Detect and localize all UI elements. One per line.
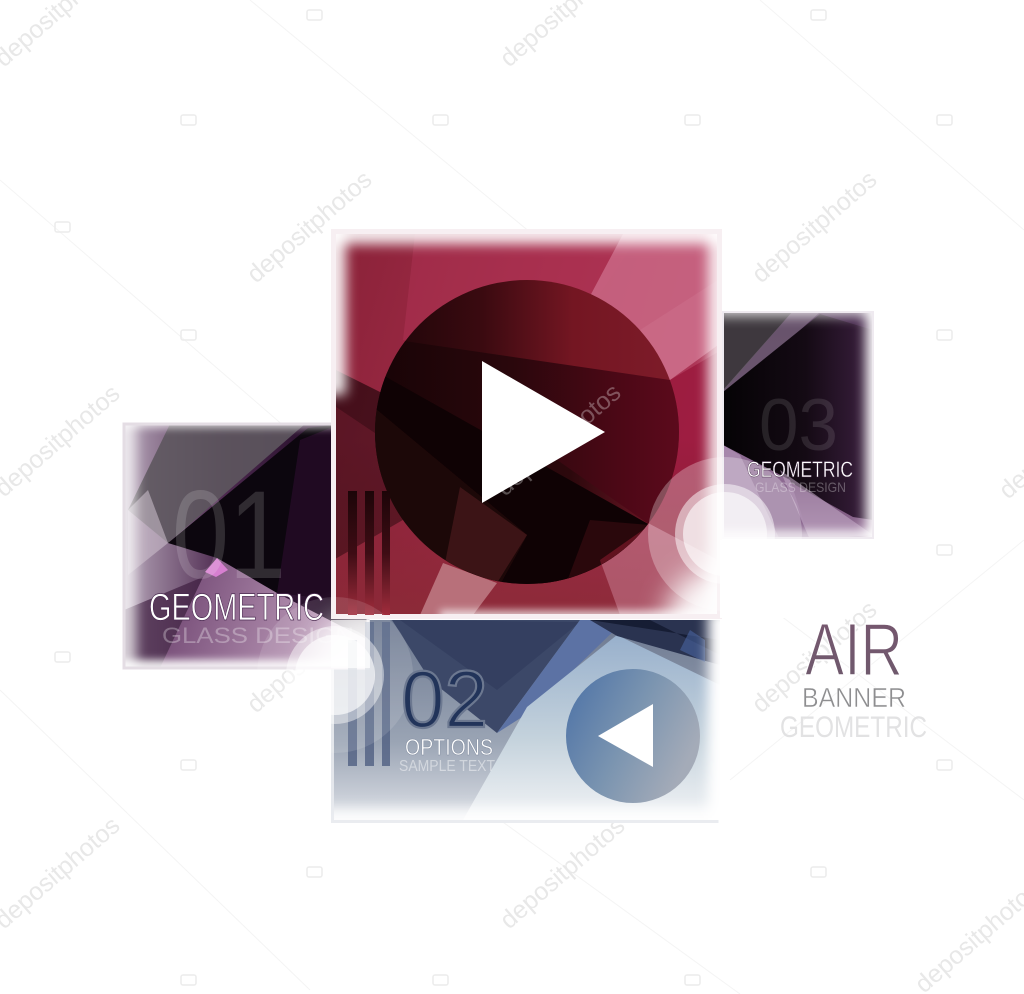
panel: 02 options (bottom, blue)	[331, 620, 720, 823]
subtitle: banner: BANNER	[802, 682, 906, 713]
ring: left glass circles	[257, 597, 413, 753]
number 01: 01	[172, 466, 286, 605]
heading: geometric right: GEOMETRIC	[747, 457, 853, 482]
subheading: glass design left: GLASS DESIGN	[162, 623, 354, 648]
heading: options: OPTIONS	[405, 734, 493, 760]
watermark pattern: depositphotos	[242, 165, 377, 289]
text: panel 03 labels	[747, 385, 853, 495]
icon: bottom circle with left arrow	[566, 669, 700, 803]
subheading: sample text: SAMPLE TEXT	[399, 758, 495, 775]
subtitle: geometric: GEOMETRIC	[780, 711, 927, 744]
text: panel 02 labels	[399, 655, 495, 775]
heading: geometric left: GEOMETRIC	[149, 587, 324, 629]
panel: 03 geometric (right, purple)	[722, 311, 874, 539]
icon: play triangle	[482, 361, 605, 503]
title: air: AIR	[805, 608, 903, 691]
number 03: 03	[759, 385, 838, 466]
text: panel 01 labels	[149, 466, 354, 648]
ring: right glass circles	[648, 457, 802, 618]
watermark pattern: depositphotos	[242, 595, 377, 719]
watermark pattern: depositphotos	[495, 811, 630, 935]
number 02: 02	[401, 655, 488, 745]
panel: 01 geometric (left, purple)	[122, 422, 370, 670]
watermark on tile: depositphotos	[491, 378, 626, 502]
panel: main play tile (crimson)	[331, 229, 722, 619]
subheading: glass design right: GLASS DESIGN	[755, 479, 846, 495]
title block: air banner geometric	[780, 608, 927, 744]
main circle	[370, 280, 690, 600]
decorative vertical bars	[348, 491, 390, 766]
watermark pattern: depositphotos	[747, 595, 882, 719]
watermark pattern: depositphotos	[747, 165, 882, 289]
